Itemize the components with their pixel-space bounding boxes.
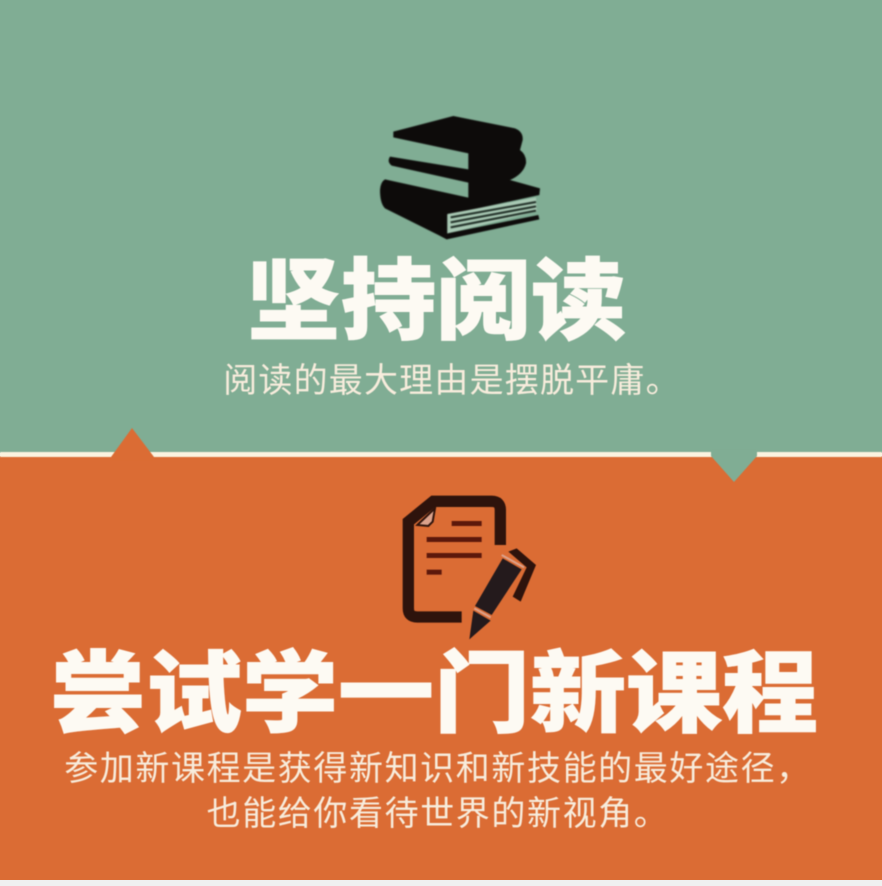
title: 坚持阅读: 坚持阅读: [246, 253, 626, 351]
title: 尝试学一门新课程: 尝试学一门新课程: [50, 645, 818, 744]
text: course subtitle: 参加新课程是获得新知识和新技能的最好途径，: [64, 750, 812, 788]
icon: document and pen: [402, 494, 536, 640]
panel: orange course section: [0, 456, 882, 880]
divider with pointer triangles: [0, 428, 882, 482]
text: reading subtitle: 阅读的最大理由是摆脱平庸。: [223, 362, 681, 400]
text: course subtitle: 也能给你看待世界的新视角。: [207, 795, 669, 833]
panel: green reading section: [0, 0, 882, 453]
icon: stack of books: [379, 115, 541, 240]
text: course subtitle: [64, 750, 812, 833]
